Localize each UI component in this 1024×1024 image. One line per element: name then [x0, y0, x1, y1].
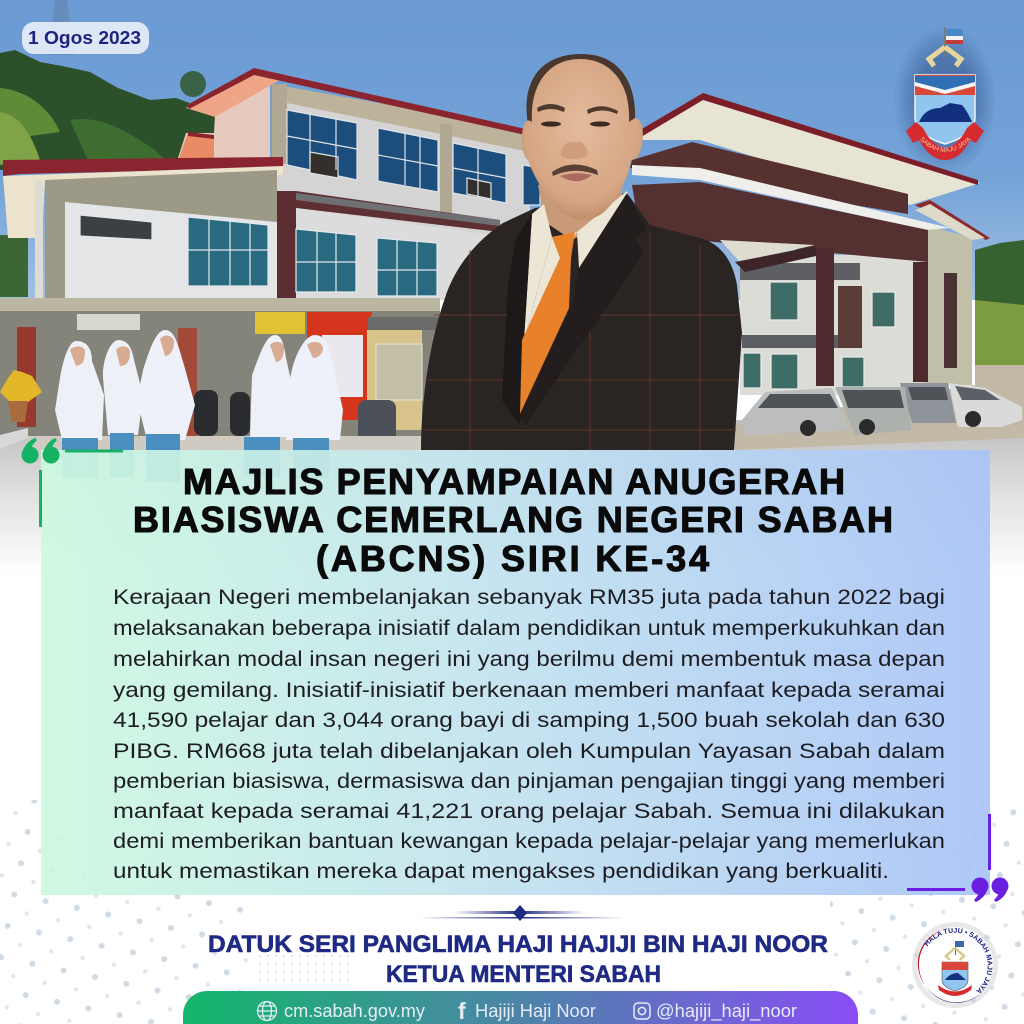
footer dot pattern right — [830, 800, 1024, 1024]
student 1 — [55, 341, 104, 478]
hair — [527, 54, 635, 132]
eyes and brows — [537, 104, 618, 127]
shield — [915, 75, 975, 144]
moustache and mouth — [552, 164, 598, 181]
body text: yang gemilang. Inisiatif-inisiatif berkenaan memberi manfaat kepada seramai — [113, 678, 945, 702]
ground floor with pillars — [0, 298, 440, 438]
title: BIASISWA CEMERLANG NEGERI SABAH — [133, 499, 893, 540]
students group — [55, 330, 343, 482]
contact bar: cm.sabah.gov.my — [284, 1001, 425, 1021]
jacket — [421, 193, 742, 450]
body text: manfaat kepada seramai 41,221 orang pelajar Sabah. Semua ini dilakukan — [113, 799, 945, 823]
portrait: Datuk Seri Panglima Haji Hajiji — [421, 54, 742, 450]
body text: melahirkan modal insan negeri ini yang berilmu demi membentuk masa depan — [113, 647, 945, 671]
flag — [944, 27, 963, 57]
background: hillside right — [975, 240, 1024, 410]
nose — [561, 142, 587, 159]
jacket check lines — [424, 232, 738, 450]
body text: pemberian biasiswa, dermasiswa dan pinjaman pengajian tinggi yang memberi — [113, 769, 945, 793]
shirt collar — [524, 191, 630, 340]
lapels — [502, 193, 647, 425]
closing quote mark — [907, 814, 1008, 902]
icon: instagram — [634, 1003, 650, 1019]
coat of arms: Sabah crest — [898, 27, 992, 168]
name and position: KETUA MENTERI SABAH — [386, 961, 661, 988]
background: hillside left — [0, 0, 215, 297]
road verge — [735, 385, 1024, 450]
silver hatchback — [835, 387, 911, 435]
opening quote mark — [22, 438, 123, 527]
grey car — [900, 383, 956, 423]
silver car front — [742, 388, 850, 436]
motto ribbon — [906, 122, 984, 160]
contact bar: @hajiji_haji_noor — [656, 1001, 797, 1022]
body text: demi memberikan bantuan kewangan kepada pelajar-pelajar yang memerlukan — [113, 829, 945, 853]
icon: globe — [258, 1002, 276, 1020]
building: left school block — [0, 68, 540, 448]
parked cars — [742, 383, 1022, 436]
pavement kerb — [0, 428, 28, 449]
seal crest — [938, 941, 972, 996]
background: sky — [0, 0, 1024, 300]
motorbikes — [194, 390, 396, 448]
orange tie — [520, 232, 575, 414]
date badge: 1 Ogos 2023 — [28, 28, 141, 48]
background: ground and road — [0, 420, 1024, 1024]
potted plant — [0, 370, 42, 422]
head — [522, 59, 643, 220]
body text: PIBG. RM668 juta telah dibelanjakan oleh Kumpulan Yayasan Sabah dalam — [113, 739, 945, 763]
neck — [538, 185, 622, 240]
arms emblem — [929, 47, 961, 66]
student 5 — [286, 335, 343, 478]
lower windows — [80, 215, 437, 296]
upper wing walls — [178, 68, 530, 300]
contact bar: Hajiji Haji Noor — [475, 1001, 596, 1021]
body text: 41,590 pelajar dan 3,044 orang bayi di samping 1,500 buah sekolah dan 630 — [113, 708, 945, 732]
upper windows — [287, 110, 540, 205]
body text: melaksanakan beberapa inisiatif dalam pendidikan untuk memperkukuhkan dan — [113, 616, 945, 640]
contact bar — [183, 991, 858, 1024]
right windows — [743, 282, 895, 389]
name and position: DATUK SERI PANGLIMA HAJI HAJIJI BIN HAJI NOOR — [208, 931, 828, 958]
body text: untuk memastikan mereka dapat mengakses pendidikan yang berkualiti. — [113, 859, 889, 883]
footer ornament — [418, 905, 624, 921]
footer halftone dots — [255, 955, 353, 987]
lower left block — [3, 157, 500, 300]
title — [133, 461, 893, 579]
motto ribbon: SABAH MAJU JAYA — [920, 137, 972, 152]
pavement — [28, 436, 428, 450]
date badge — [22, 22, 149, 54]
seal motto: HALA TUJU • SABAH MAJU JAYA — [924, 928, 992, 993]
student 4 — [244, 335, 292, 477]
footer dot pattern left — [0, 800, 250, 1024]
student 2 — [103, 340, 143, 477]
icon: facebook: f — [458, 998, 466, 1024]
white car — [949, 383, 1022, 427]
body text: Kerajaan Negeri membelanjakan sebanyak RM35 juta pada tahun 2022 bagi — [113, 585, 945, 609]
title: MAJLIS PENYAMPAIAN ANUGERAH — [183, 461, 845, 502]
title: (ABCNS) SIRI KE-34 — [316, 538, 709, 579]
student 3 — [137, 330, 195, 482]
body text — [113, 585, 945, 883]
panel: text background — [41, 450, 990, 895]
name and position — [208, 931, 828, 988]
round seal — [912, 922, 998, 1008]
building: right entrance block — [630, 93, 990, 395]
